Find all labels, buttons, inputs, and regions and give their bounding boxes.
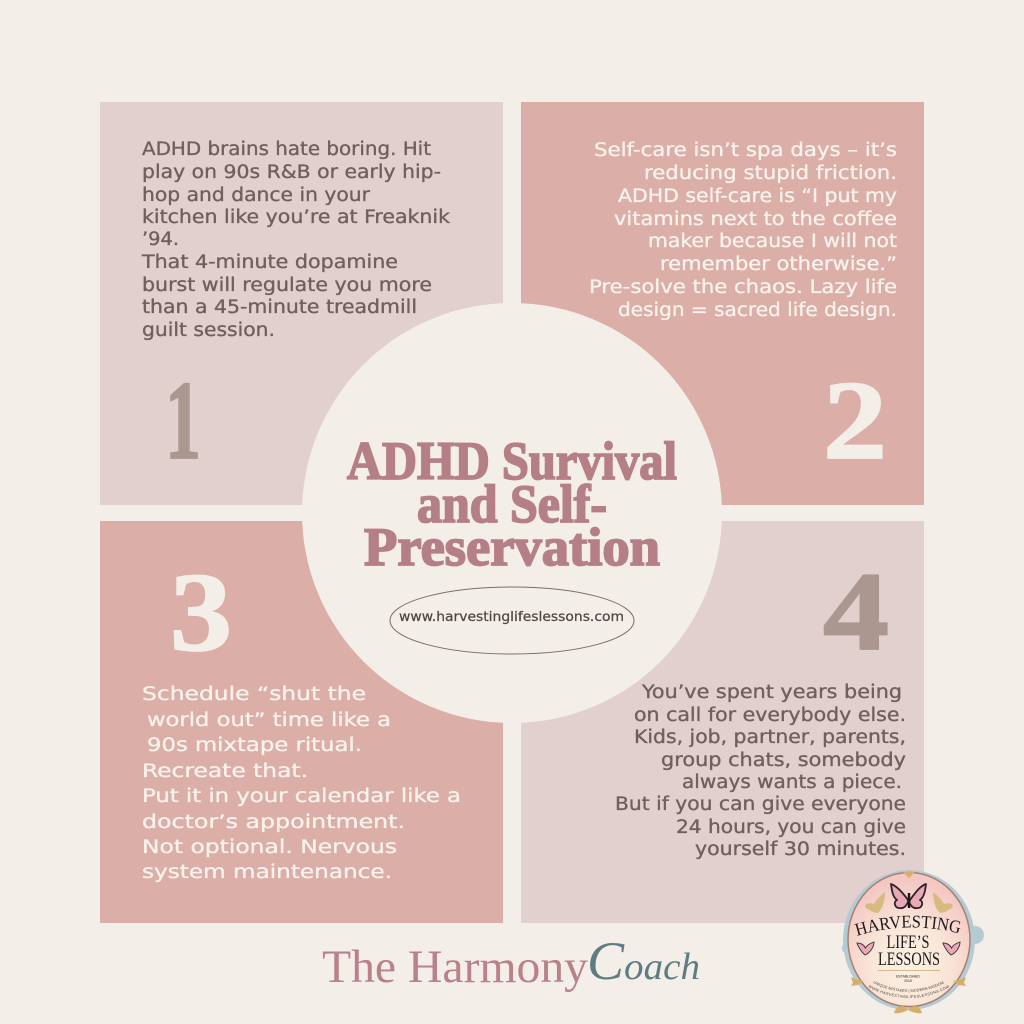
panel 3 text: world out” time like a: [147, 710, 391, 731]
badge wordmark: [854, 916, 960, 998]
title: Preservation: [364, 517, 660, 577]
title: ADHD Survival: [347, 431, 677, 491]
icon: small butterfly left: [857, 942, 874, 955]
panel 3 text: system maintenance.: [142, 862, 392, 883]
icon: main pink butterfly: [891, 884, 926, 908]
badge: Harvesting Life's Lessons: [842, 870, 984, 1014]
panel 1 text: kitchen like you’re at Freaknik: [142, 207, 450, 228]
title: [347, 431, 677, 577]
panel 2 text: ADHD self-care is “I put my: [618, 186, 897, 207]
panel 1 text: [141, 139, 450, 341]
center circle: [302, 303, 722, 723]
badge wordmark: HARVESTING: [854, 916, 960, 936]
badge wordmark: 2019: [904, 979, 912, 983]
panel 4 text: always wants a piece.: [682, 772, 902, 793]
panel 2 text: reducing stupid friction.: [644, 163, 897, 184]
panel 4 text: group chats, somebody: [661, 750, 906, 771]
panel 3 text: Recreate that.: [142, 761, 308, 782]
panel 1 text: play on 90s R&B or early hip-: [142, 162, 441, 183]
badge wordmark: LIFE’S: [886, 932, 930, 953]
panel 2 text: [589, 140, 897, 321]
website oval: [390, 587, 634, 654]
panel 3 text: Schedule “shut the: [142, 684, 366, 705]
icon: small butterfly right: [943, 942, 960, 955]
footer logo: The Harmony Coach: The Harmony: [322, 941, 588, 993]
panel 2 text: Self-care isn’t spa days – it’s: [594, 140, 897, 161]
panel 1 text: burst will regulate you more: [142, 275, 432, 296]
panel 2: reduce friction: [521, 102, 924, 505]
panel 4 text: You’ve spent years being: [641, 682, 902, 703]
number 1: 1: [165, 359, 201, 483]
panel 3 text: 90s mixtape ritual.: [147, 735, 362, 756]
panel 4 text: But if you can give everyone: [615, 794, 906, 815]
panel 4 text: yourself 30 minutes.: [695, 839, 906, 860]
panel 1 text: hop and dance in your: [142, 185, 370, 206]
panel 4: give yourself time: [521, 521, 924, 923]
title: and Self-: [417, 474, 607, 534]
icon: gold butterfly left: [865, 892, 885, 913]
badge blue scalloped edge: [842, 870, 984, 1010]
panel 3 text: [142, 684, 461, 883]
number 4: 4: [823, 550, 889, 674]
panel 2 text: remember otherwise.”: [660, 254, 897, 275]
number 2: 2: [823, 359, 887, 483]
panel 4 text: on call for everybody else.: [634, 705, 906, 726]
panel 1 text: guilt session.: [142, 320, 275, 341]
number 3: 3: [170, 551, 232, 675]
panel 2 text: vitamins next to the coffee: [614, 209, 897, 230]
panel 4 text: 24 hours, you can give: [676, 817, 906, 838]
panel 3 text: Not optional. Nervous: [142, 837, 397, 858]
badge wordmark: UNIQUE MISTAKES | MODERN WISDOM: [874, 980, 944, 993]
badge wordmark: ESTABLISHED: [896, 974, 920, 978]
panel 1 text: ’94.: [142, 229, 179, 250]
panel 3: shut the world out: [100, 521, 503, 923]
gold ornaments: [851, 872, 966, 1013]
badge wordmark: WWW.HARVESTINGLIFESLESSONS.COM: [868, 984, 949, 998]
panel 4 text: Kids, job, partner, parents,: [634, 727, 906, 748]
icon: gold butterfly right: [933, 892, 953, 913]
panel 3 text: Put it in your calendar like a: [142, 786, 461, 807]
panel 4 text: [615, 682, 906, 860]
panel 1: music dopamine: [100, 102, 503, 505]
website oval: www.harvestinglifeslessons.com: [399, 610, 624, 625]
badge wordmark: LESSONS: [878, 949, 940, 970]
footer logo: The Harmony Coach: Coach: [587, 931, 700, 991]
panel 1 text: ADHD brains hate boring. Hit: [142, 139, 431, 160]
panel 1 text: That 4-minute dopamine: [141, 252, 398, 273]
panel 2 text: design = sacred life design.: [618, 300, 897, 321]
panel 1 text: than a 45-minute treadmill: [142, 297, 417, 318]
panel 3 text: doctor’s appointment.: [142, 812, 405, 833]
panel 2 text: maker because I will not: [648, 231, 897, 252]
footer logo: The Harmony Coach: [322, 931, 700, 993]
badge disc: [848, 872, 970, 1006]
panel 2 text: Pre-solve the chaos. Lazy life: [589, 277, 897, 298]
